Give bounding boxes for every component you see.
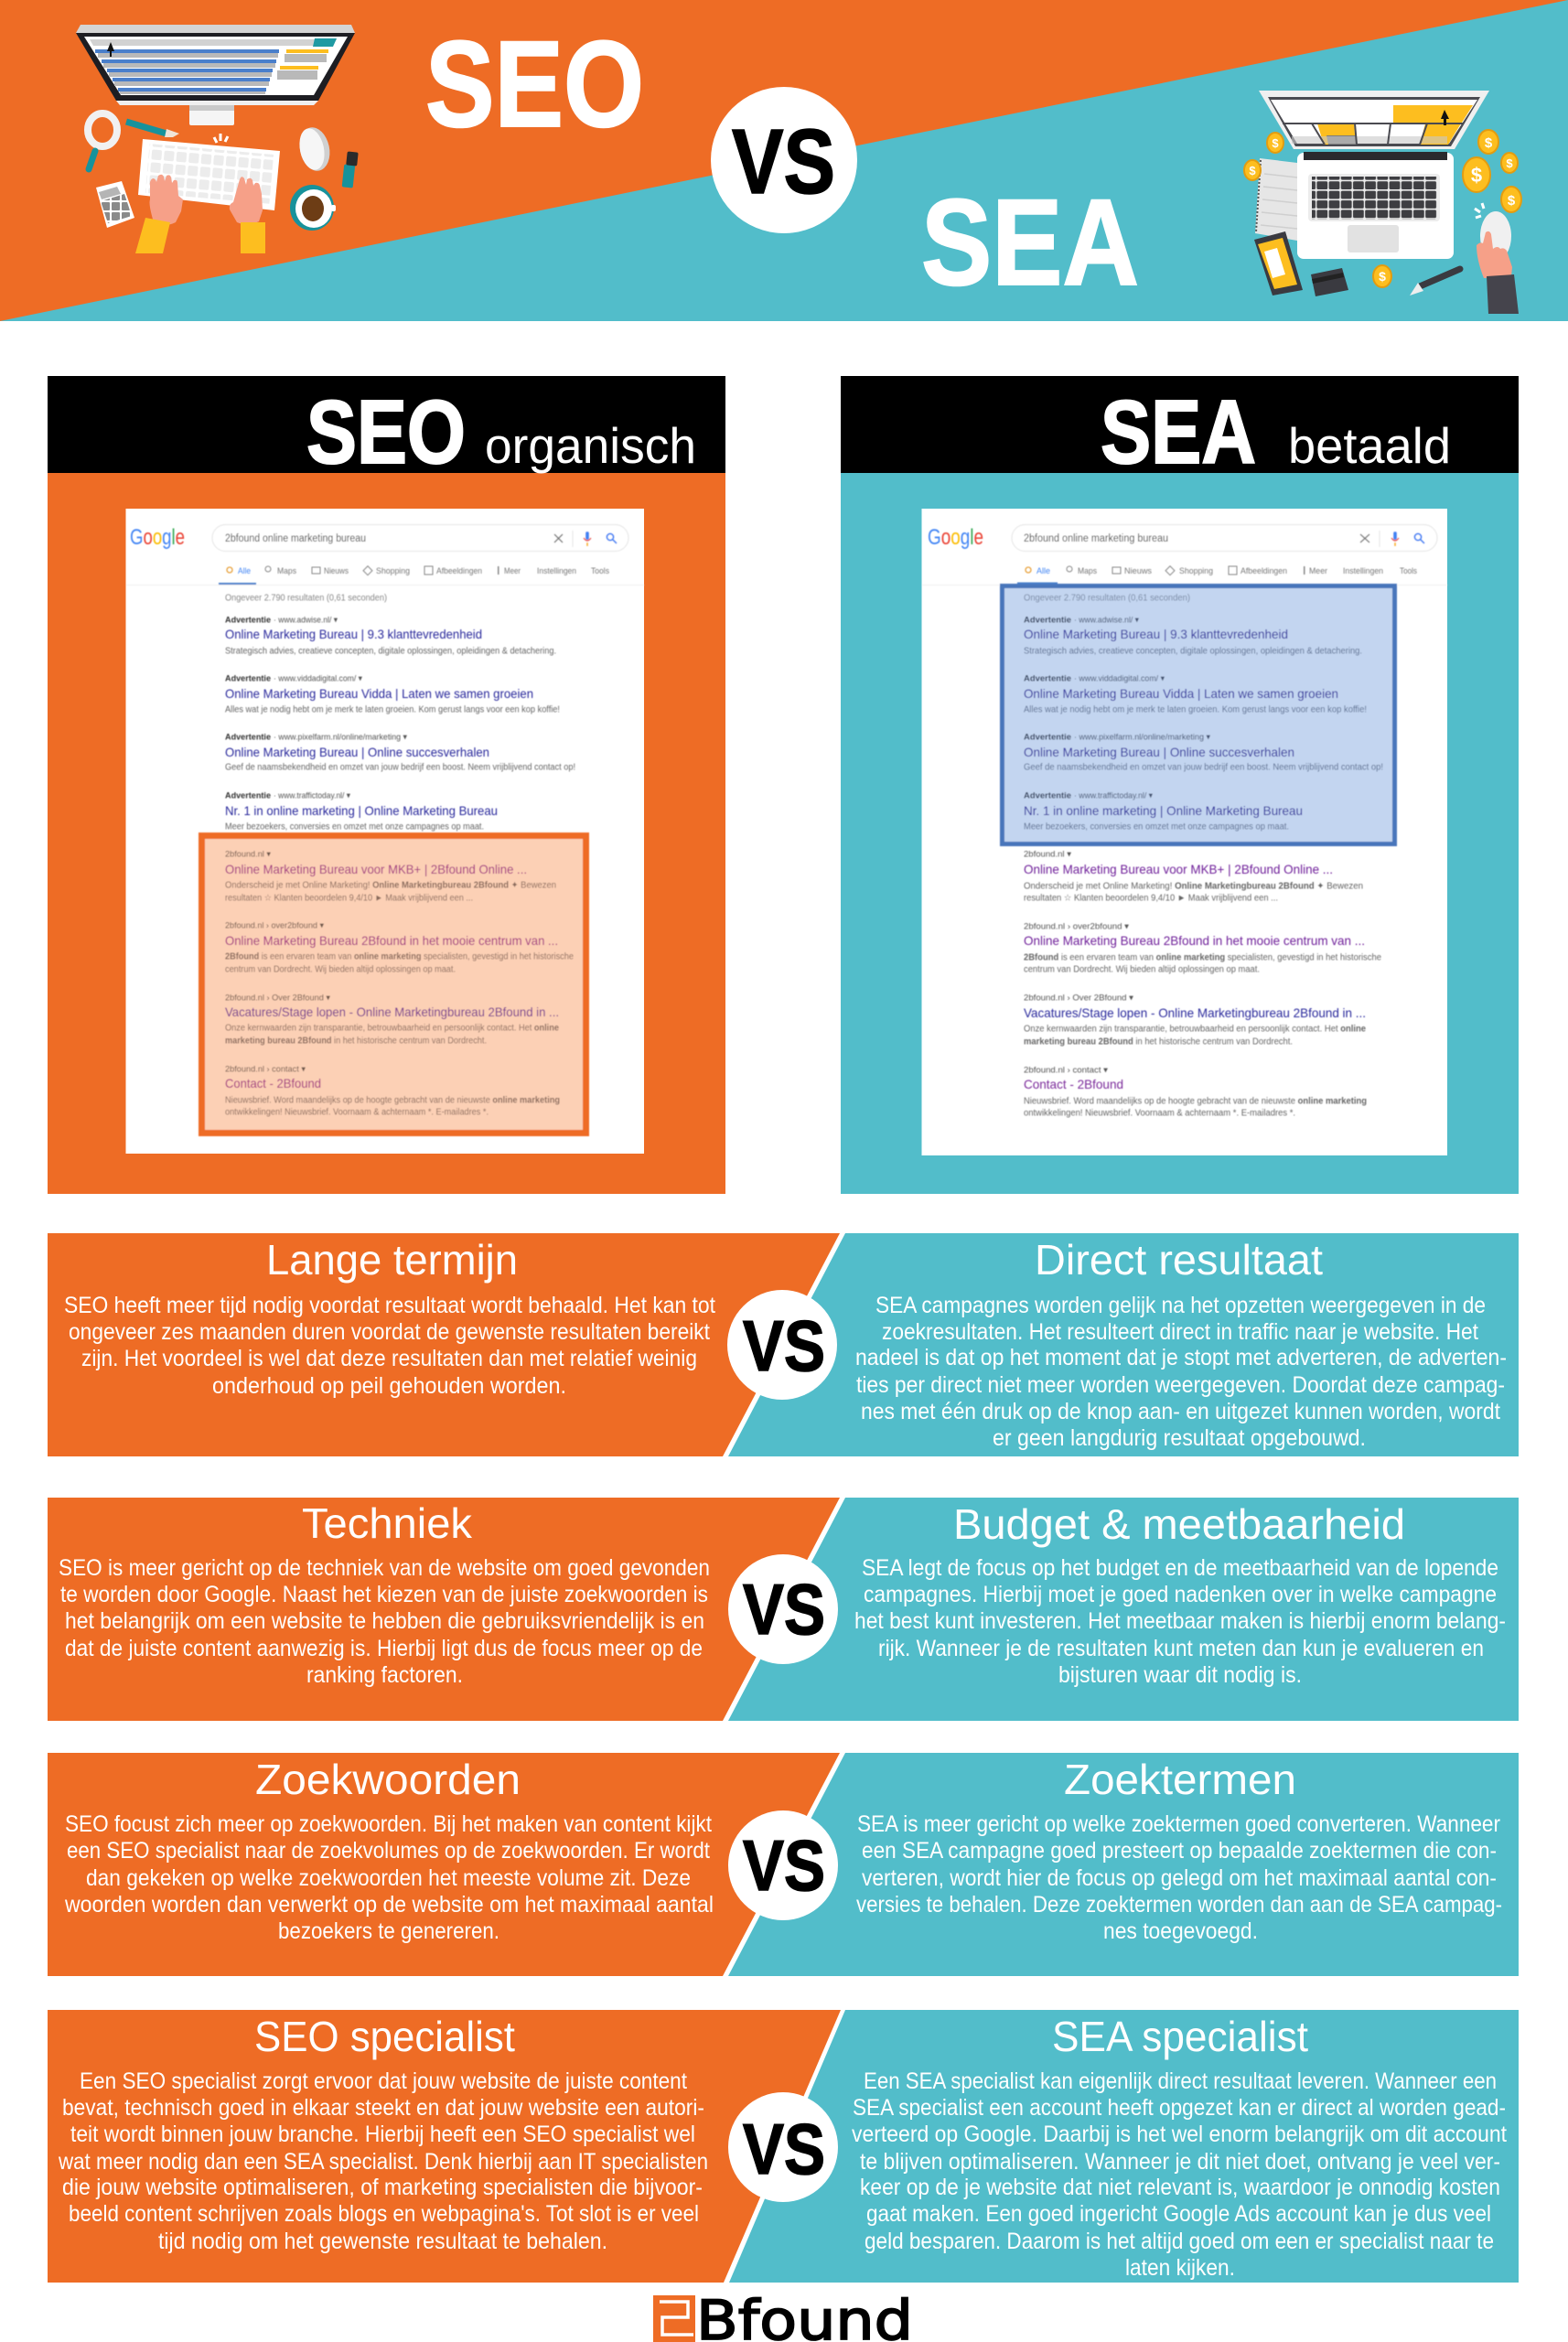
paid results: Meer bezoekers, conversies en omzet met onze campagnes op maat. [225,822,484,833]
navigation tabs: Afbeeldingen [1240,566,1287,576]
paid results highlight box [1003,586,1394,843]
panel: SEO specialist: SEO specialist [254,2013,515,2060]
panel: Direct resultaat: ties per direct niet meer worden weergegeven. Doordat deze campag- [856,1372,1505,1398]
paid results: Advertentie [1024,673,1071,684]
panel: Lange termijn [48,1233,840,1456]
panel: Direct resultaat: zoekresultaten. Het resulteert direct in traffic naar je website. Het [882,1319,1478,1345]
organic results: 2bfound.nl › contact ▾ [1024,1065,1108,1076]
Google logo: Google [130,525,185,550]
panel: Techniek: ranking factoren. [306,1662,463,1688]
panel: Direct resultaat: SEA campagnes worden gelijk na het opzetten weergegeven in de [875,1293,1486,1318]
panel: SEA specialist: laten kijken. [1125,2255,1235,2281]
panel: Lange termijn: Lange termijn [266,1236,518,1284]
search bar [212,525,628,551]
paid results: · www.traffictoday.nl/ ▾ [274,790,350,801]
panel: Zoektermen [728,1753,1519,1976]
paid results: · www.adwise.nl/ ▾ [1074,615,1139,626]
panel: Zoektermen: SEA is meer gericht op welke zoektermen goed converteren. Wanneer [857,1811,1500,1837]
panel: SEA specialist: verteerd op Google. Daarbij is het wel enorm belangrijk om dit account [852,2122,1507,2147]
VS badge [727,1290,837,1400]
organic results highlight box: ontwikkelingen! Nieuwsbrief. Voornaam & achternaam *. E-mailadres *. [225,1107,489,1118]
panel: Direct resultaat [728,1233,1519,1456]
organic results highlight box: Onze kernwaarden zijn transparantie, betrouwbaarheid en persoonlijk contact. Het online [225,1023,559,1034]
icon: laptop with coins: $ [1379,269,1386,284]
organic results highlight box: resultaten ☆ Klanten beoordelen 9,4/10 ► Maak vrijblijvend een ... [225,893,473,904]
VS badge: VS [743,1569,825,1649]
icon: laptop with coins: $ [1506,156,1513,170]
icon: laptop with coins: $ [1508,193,1516,209]
paid results: Online Marketing Bureau Vidda | Laten we samen groeien [225,686,533,701]
paid results: · www.viddadigital.com/ ▾ [1074,673,1165,684]
paid results: Advertentie [225,732,271,743]
search bar: 2bfound online marketing bureau [1024,533,1168,544]
navigation tabs: Afbeeldingen [436,566,482,576]
panel: SEO specialist: bevat, technisch goed in elkaar steekt en dat jouw website een autori- [62,2095,704,2121]
panel header: SEA betaald [841,376,1519,482]
paid results: Online Marketing Bureau | Online succesverhalen [1024,745,1294,759]
panel header: SEA betaald: SEA [1101,381,1256,482]
panel: Direct resultaat: nes met één druk op de knop aan- en uitgezet kunnen worden, wordt [861,1399,1500,1424]
panel: SEO specialist: teit wordt binnen jouw branche. Hierbij heeft een SEO specialist wel [70,2122,695,2147]
VS badge [728,2092,838,2202]
organic results highlight box: Vacatures/Stage lopen - Online Marketingbureau 2Bfound in ... [225,1004,559,1019]
panel header: SEO organisch: organisch [485,417,696,474]
panel: Budget & meetbaarheid: Budget & meetbaarheid [953,1500,1405,1548]
paid results: · www.traffictoday.nl/ ▾ [1074,790,1153,801]
panel: Techniek [48,1498,840,1721]
navigation tabs [922,566,1447,586]
organic results highlight box: 2bfound.nl › over2bfound ▾ [225,920,324,931]
organic results highlight box [201,836,585,1133]
paid results: Advertentie [1024,615,1071,626]
panel: Zoekwoorden: SEO focust zich meer op zoekwoorden. Bij het maken van content kijkt [65,1811,712,1837]
organic results highlight box: 2Bfound is een ervaren team van online marketing specialisten, gevestigd in het historische [225,951,574,962]
organic results: resultaten ☆ Klanten beoordelen 9,4/10 ► Maak vrijblijvend een ... [1024,893,1278,904]
icon: laptop with coins: $ [1272,136,1279,150]
paid results: · www.pixelfarm.nl/online/marketing ▾ [274,732,407,743]
panel: SEO specialist: wat meer nodig dan een SEA specialist. Denk hierbij aan IT specialisten [58,2149,708,2175]
paid results: Advertentie [225,673,271,684]
organic results: Onderscheid je met Online Marketing! Online Marketingbureau 2Bfound ✦ Bewezen [1024,882,1363,891]
search bar: 2bfound online marketing bureau [225,533,366,544]
panel: SEO organisch [48,376,725,1194]
comparison row: Techniek vs Budget & meetbaarheid [48,1498,1519,1721]
panel header: SEO organisch: SEO [306,381,466,482]
paid results: Nr. 1 in online marketing | Online Marketing Bureau [225,803,498,818]
organic results: Onze kernwaarden zijn transparantie, betrouwbaarheid en persoonlijk contact. Het online [1024,1025,1366,1034]
panel: Techniek: dat de juiste content aanwezig is. Hierbij ligt dus de focus meer op de [65,1636,703,1661]
panel: Budget & meetbaarheid [728,1498,1519,1721]
icon: laptop with coins: $ [1471,164,1482,187]
paid results: · www.viddadigital.com/ ▾ [274,673,362,684]
paid results: Online Marketing Bureau | 9.3 klanttevredenheid [225,627,482,641]
icon: laptop with coins [1244,91,1521,314]
organic results: 2bfound.nl › over2bfound ▾ [1024,922,1129,931]
paid results: Nr. 1 in online marketing | Online Marketing Bureau [1024,803,1303,818]
paid results: Alles wat je nodig hebt om je merk te laten groeien. Kom gerust langs voor een kop koffie! [1024,704,1367,715]
organic results highlight box: Online Marketing Bureau 2Bfound in het mooie centrum van ... [225,933,558,948]
panel: SEO specialist: Een SEO specialist zorgt ervoor dat jouw website de juiste content [80,2068,687,2094]
organic results highlight box: 2bfound.nl › Over 2Bfound ▾ [225,994,330,1003]
panel: SEA specialist [729,2010,1519,2283]
organic results highlight box: marketing bureau 2Bfound in het historische centrum van Dordrecht. [225,1036,487,1047]
VS badge [728,1554,838,1664]
navigation tabs: Meer [504,566,521,576]
panel: SEO specialist: die jouw website optimaliseren, of marketing specialisten die bijvoor- [62,2175,703,2200]
organic results highlight box: Online Marketing Bureau voor MKB+ | 2Bfound Online ... [225,862,527,876]
panel: SEO specialist: beeld content schrijven zoals blogs en webpagina's. Tot slot is er veel [69,2201,699,2227]
VS badge: VS [743,1305,825,1386]
search results screenshot: paid highlighted [922,509,1447,1155]
navigation tabs: Instellingen [537,566,576,576]
organic results: Vacatures/Stage lopen - Online Marketingbureau 2Bfound in ... [1024,1005,1366,1020]
comparison row: Zoekwoorden vs Zoektermen [48,1753,1519,1976]
paid results: Advertentie [1024,732,1071,743]
VS badge: VS [743,2109,825,2189]
panel: Zoekwoorden: woorden worden dan verwerkt op de website om het maximaal aantal [64,1892,714,1918]
navigation tabs: Alle [238,566,251,576]
panel header: SEA betaald: betaald [1288,417,1451,474]
navigation tabs: Shopping [376,566,410,576]
panel: Lange termijn: SEO heeft meer tijd nodig voordat resultaat wordt behaald. Het kan tot [64,1293,715,1318]
organic results highlight box: Nieuwsbrief. Word maandelijks op de hoogte gebracht van de nieuwste online marketing [225,1096,560,1105]
panel: SEA specialist: gaat maken. Een goed ingericht Google Ads account kan je dus veel [866,2201,1491,2227]
organic results: Online Marketing Bureau 2Bfound in het mooie centrum van ... [1024,933,1365,948]
organic results highlight box: centrum van Dordrecht. Wij bieden altijd oplossingen op maat. [225,964,456,975]
panel: Zoekwoorden: bezoekers te genereren. [278,1918,499,1944]
paid results: Advertentie [225,615,271,626]
organic results highlight box: 2bfound.nl ▾ [225,849,271,860]
panel: SEA betaald [841,376,1519,1194]
panel: SEA specialist: te blijven optimaliseren. Wanneer je dit niet doet, ontvang je veel ver- [860,2149,1500,2175]
paid results [225,615,575,833]
navigation tabs: Maps [1078,566,1097,576]
navigation tabs: Meer [1309,566,1327,576]
organic results: marketing bureau 2Bfound in het historische centrum van Dordrecht. [1024,1037,1293,1047]
paid results: Geef de naamsbekendheid en omzet van jouw bedrijf een boost. Neem vrijblijvend contact op! [225,763,575,772]
panel: Zoektermen: een SEA campagne goed presteert op bepaalde zoektermen die con- [862,1838,1497,1864]
panel: Techniek: SEO is meer gericht op de techniek van de website om goed gevonden [59,1555,710,1581]
paid results: Online Marketing Bureau | 9.3 klanttevredenheid [1024,627,1288,641]
paid results: · www.adwise.nl/ ▾ [274,615,338,626]
search results screenshot: paid highlighted: Ongeveer 2.790 resultaten (0,61 seconden) [1024,593,1190,604]
organic results highlight box: 2bfound.nl › contact ▾ [225,1065,306,1074]
paid results: Strategisch advies, creatieve concepten, digitale oplossingen, opleidingen & detachering. [1024,646,1362,657]
navigation tabs: Nieuws [324,566,349,576]
icon: desktop workplace [76,25,359,253]
icon: laptop with coins: $ [1485,135,1493,151]
panel: Zoekwoorden: Zoekwoorden [255,1756,521,1803]
paid results [1024,615,1383,833]
panel: Budget & meetbaarheid: campagnes. Hierbij moet je goed nadenken over in welke campagne [864,1582,1497,1607]
panel: Direct resultaat: nadeel is dat op het moment dat je stopt met adverteren, de adverten- [855,1345,1507,1370]
panel: SEA specialist: SEA specialist [1052,2013,1308,2060]
navigation tabs: Maps [277,566,296,576]
panel: Zoektermen: verteren, wordt hier de focus op gelegd om het maximaal aantal con- [862,1865,1497,1891]
VS badge: VS [743,1825,825,1906]
panel: Zoektermen: Zoektermen [1064,1756,1296,1803]
panel: Budget & meetbaarheid: rijk. Wanneer je de resultaten kunt meten dan kun je evalueren en [878,1636,1484,1661]
panel: Zoekwoorden [48,1753,840,1976]
paid results: Advertentie [1024,790,1071,801]
organic results: 2Bfound is een ervaren team van online marketing specialisten, gevestigd in het historische [1024,953,1381,962]
organic results: centrum van Dordrecht. Wij bieden altijd oplossingen op maat. [1024,964,1260,975]
navigation tabs: Tools [591,566,609,576]
panel: Budget & meetbaarheid: SEA legt de focus op het budget en de meetbaarheid van de lopende [862,1555,1498,1581]
panel: Techniek: Techniek [302,1499,473,1547]
paid results: Alles wat je nodig hebt om je merk te laten groeien. Kom gerust langs voor een kop koffie! [225,704,560,715]
organic results: Contact - 2Bfound [1024,1077,1123,1091]
navigation tabs: Tools [1400,566,1417,576]
panel: Direct resultaat: er geen langdurig resultaat opgebouwd. [993,1425,1366,1451]
paid results: · www.pixelfarm.nl/online/marketing ▾ [1074,732,1210,743]
navigation tabs [126,566,644,586]
paid results: Online Marketing Bureau | Online succesverhalen [225,745,489,759]
panel: Budget & meetbaarheid: het best kunt investeren. Het meetbaar maken is hierbij enorm belang- [854,1608,1506,1634]
panel: Budget & meetbaarheid: bijsturen waar dit nodig is. [1058,1662,1302,1688]
panel: Techniek: het belangrijk om een website te hebben die gebruiksvriendelijk is en [65,1608,704,1634]
VS badge [728,1810,838,1920]
paid results: Geef de naamsbekendheid en omzet van jouw bedrijf een boost. Neem vrijblijvend contact op! [1024,763,1383,772]
panel header: SEO organisch [48,376,725,482]
organic results: ontwikkelingen! Nieuwsbrief. Voornaam & achternaam *. E-mailadres *. [1024,1109,1295,1118]
search results screenshot: organic highlighted [126,509,644,1154]
top banner [0,0,1568,321]
Google logo: Google [928,525,983,550]
organic results highlight box: Onderscheid je met Online Marketing! Online Marketingbureau 2Bfound ✦ Bewezen [225,880,556,891]
navigation tabs: Shopping [1179,566,1213,576]
paid results: Advertentie [225,790,271,801]
VS badge: VS [732,111,835,213]
organic results: 2bfound.nl › Over 2Bfound ▾ [1024,994,1133,1003]
organic results: 2bfound.nl ▾ [1024,849,1071,860]
heading: SEA: SEA [921,175,1139,311]
panel: SEA specialist: keer op de je website dat niet relevant is, waardoor je onnodig kosten [860,2175,1500,2200]
heading: SEO: SEO [425,16,644,153]
panel: Techniek: te worden door Google. Naast het kiezen van de juiste zoekwoorden is [60,1582,708,1607]
panel: Lange termijn: zijn. Het voordeel is wel dat deze resultaten dan met relatief weinig [81,1346,697,1371]
VS badge [711,87,857,233]
organic results: Nieuwsbrief. Word maandelijks op de hoogte gebracht van de nieuwste online marketing [1024,1096,1367,1107]
paid results: Online Marketing Bureau Vidda | Laten we samen groeien [1024,686,1338,701]
navigation tabs: Nieuws [1124,566,1152,576]
panel: SEO specialist [48,2010,841,2283]
panel: SEA specialist: SEA specialist een account heeft opgezet kan er direct al worden gead- [853,2095,1506,2121]
search bar [1012,525,1437,551]
navigation tabs: Instellingen [1343,566,1383,576]
panel: Zoekwoorden: een SEO specialist naar de zoekvolumes op de zoekwoorden. Er wordt [67,1838,710,1864]
panel: Lange termijn: ongeveer zes maanden duren voordat de gewenste resultaten bereikt [69,1319,710,1345]
panel: Zoekwoorden: dan gekeken op welke zoekwoorden het meeste volume zit. Deze [86,1865,691,1891]
panel: SEA specialist: geld besparen. Daarom is het altijd goed om een er specialist naar te [865,2229,1494,2254]
paid results: Meer bezoekers, conversies en omzet met onze campagnes op maat. [1024,822,1289,833]
panel: SEA specialist: Een SEA specialist kan eigenlijk direct resultaat leveren. Wanneer een [864,2068,1497,2094]
panel: Zoektermen: versies te behalen. Deze zoektermen worden dan aan de SEA campag- [856,1892,1502,1918]
organic results [1024,849,1381,1118]
panel: Lange termijn: onderhoud op peil gehouden worden. [212,1373,566,1399]
search results screenshot: organic highlighted: Ongeveer 2.790 resultaten (0,61 seconden) [225,593,387,604]
comparison row: Lange termijn vs Direct resultaat [48,1233,1519,1456]
navigation tabs: Alle [1036,566,1050,576]
panel: SEO specialist: tijd nodig om het gewenste resultaat te behalen. [158,2229,607,2254]
organic results: Online Marketing Bureau voor MKB+ | 2Bfound Online ... [1024,862,1333,876]
comparison row: SEO specialist vs SEA specialist [48,2010,1519,2283]
icon: laptop with coins: $ [1249,164,1256,177]
panel: Zoektermen: nes toegevoegd. [1103,1918,1258,1944]
panel: Direct resultaat: Direct resultaat [1035,1236,1323,1284]
paid results: Strategisch advies, creatieve concepten, digitale oplossingen, opleidingen & detachering. [225,646,556,657]
organic results highlight box: Contact - 2Bfound [225,1076,321,1090]
